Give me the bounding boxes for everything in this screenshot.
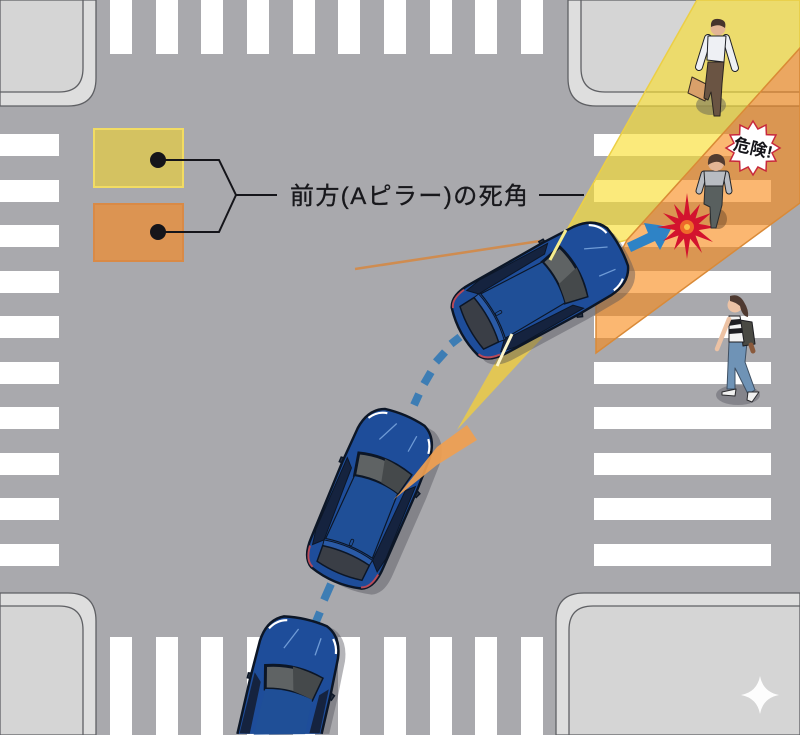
car: turning, upper position <box>441 209 646 374</box>
arrow: direction of travel <box>627 223 672 252</box>
pedestrian: woman with backpack <box>716 295 760 405</box>
yellow blind-spot cone <box>550 0 800 260</box>
orange blind-spot cone <box>596 48 800 353</box>
legend: bracket leader lines <box>151 153 584 239</box>
pedestrian: man with bag <box>688 19 735 116</box>
dashed vehicle path <box>315 337 460 624</box>
callout: danger burst <box>726 121 780 175</box>
legend: yellow swatch <box>94 129 183 187</box>
crosswalk: top <box>110 0 543 54</box>
orange sight line <box>355 241 540 269</box>
sidewalk: top left corner <box>0 0 96 106</box>
car: middle of turn <box>295 399 452 603</box>
pedestrian: person in danger <box>699 154 729 229</box>
A-pillar line: front <box>550 230 566 260</box>
sidewalk: bottom left corner <box>0 593 96 735</box>
callout: danger burst: 危険! <box>731 135 774 162</box>
sidewalk: top right corner <box>568 0 800 106</box>
yellow rear blind-spot wedge <box>457 333 543 430</box>
sidewalk: bottom right corner <box>556 593 800 735</box>
crosswalk: right <box>594 134 771 566</box>
icon: sparkle <box>741 676 779 714</box>
crosswalk: bottom <box>110 637 543 735</box>
heading: legend label: 前方(Aピラー)の死角 <box>290 183 528 210</box>
A-pillar line: rear <box>497 334 512 366</box>
crosswalk: left <box>0 134 59 566</box>
icon: collision burst <box>657 193 717 259</box>
legend: orange swatch <box>94 204 183 261</box>
orange wedge over middle car <box>390 425 477 503</box>
car: lower, entering crosswalk (front half visible) <box>234 609 353 735</box>
